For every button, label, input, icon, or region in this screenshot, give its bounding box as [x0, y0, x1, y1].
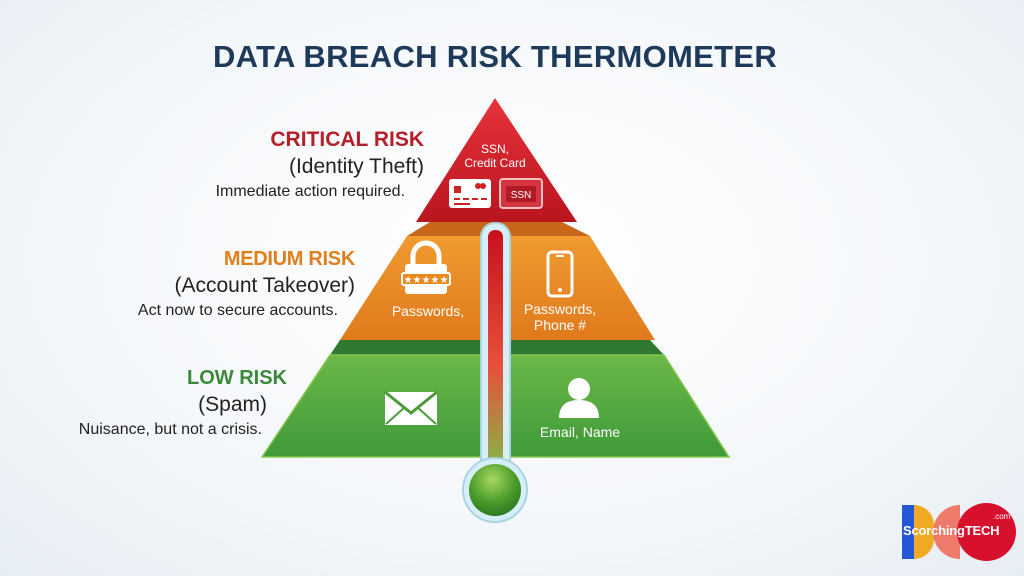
- tier: critical: [416, 98, 577, 222]
- logo: .com: [993, 512, 1010, 521]
- icon: phone: [548, 252, 572, 296]
- label: critical: Immediate action required.: [216, 183, 405, 200]
- logo: ScorchingTECH: [903, 523, 999, 538]
- label: medium: [138, 248, 356, 319]
- label: medium: (Account Takeover): [174, 274, 355, 297]
- icon: lock: ★★★★★: [404, 275, 448, 286]
- title: DATA BREACH RISK THERMOMETER: [213, 39, 777, 74]
- label: critical: (Identity Theft): [289, 155, 424, 178]
- logo: [902, 503, 1016, 561]
- icon: lock: [402, 243, 450, 294]
- tier: low: [262, 340, 729, 457]
- tier: low: Email, Name: [540, 424, 620, 440]
- icon: user: [559, 378, 599, 418]
- label: critical: [216, 128, 424, 200]
- label: low: [79, 367, 287, 438]
- label: low: Nuisance, but not a crisis.: [79, 421, 262, 438]
- label: medium: Act now to secure accounts.: [138, 302, 338, 319]
- tier: critical: Credit Card: [464, 156, 526, 170]
- icon: SSN card: [500, 179, 542, 208]
- tier: medium: Passwords,: [524, 301, 596, 317]
- icon: envelope: [385, 392, 437, 425]
- label: low: LOW RISK: [187, 367, 287, 389]
- thermometer: [463, 223, 527, 522]
- tier: medium: Passwords,: [392, 303, 464, 319]
- icon: credit card: [449, 179, 491, 208]
- icon: SSN card: SSN: [511, 190, 531, 201]
- tier: critical: SSN,: [481, 142, 509, 156]
- tier: medium: [340, 222, 655, 340]
- tier: medium: Phone #: [534, 317, 586, 333]
- label: low: (Spam): [198, 393, 267, 416]
- label: medium: MEDIUM RISK: [224, 248, 355, 270]
- label: critical: CRITICAL RISK: [270, 128, 424, 151]
